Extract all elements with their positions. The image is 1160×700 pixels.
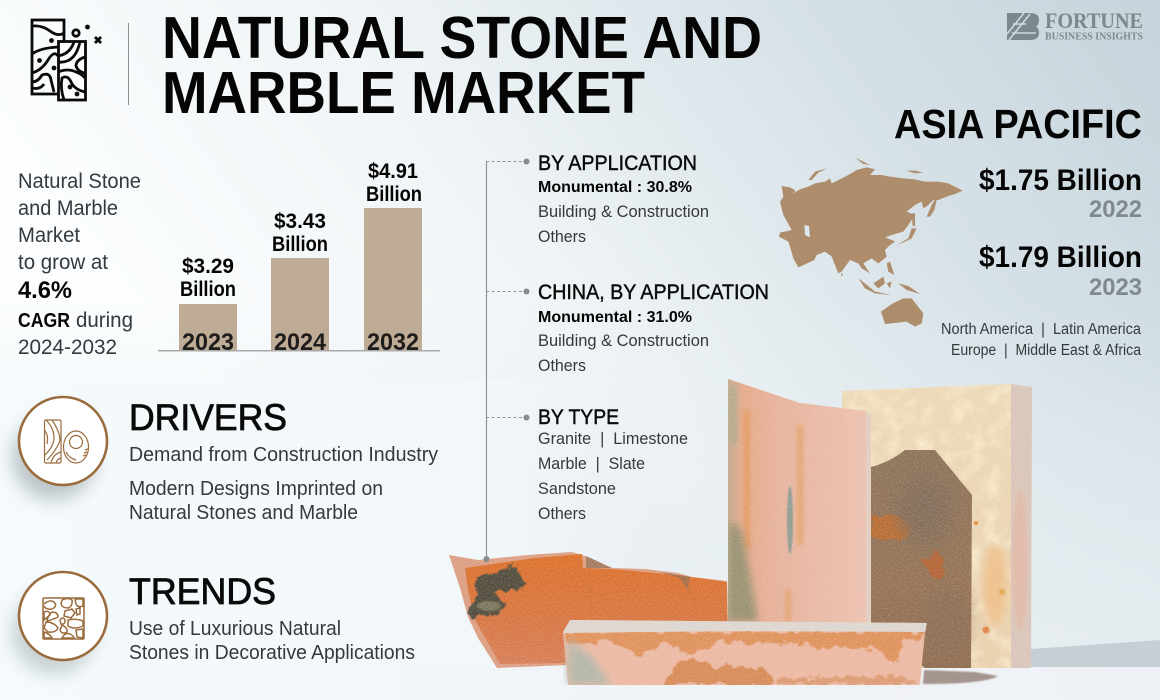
photo: natural stone blocks (300, 379, 1160, 700)
growth text: during (76, 309, 133, 332)
bar chart: market size: Billion (180, 278, 236, 301)
segment: by application: BY APPLICATION (538, 151, 697, 175)
growth text: to grow at (18, 251, 108, 274)
backdrop wedge and floor (300, 640, 1160, 700)
drivers text: Natural Stones and Marble (129, 502, 358, 524)
icon: trends (12, 572, 107, 674)
top-left icon: stone slabs (32, 20, 101, 100)
segment: China by application: Building & Construction (538, 331, 709, 350)
regional heading and figures (894, 101, 1142, 359)
growth text: 4.6% (18, 277, 72, 304)
growth text: Market (18, 224, 80, 247)
segment: by application (538, 151, 709, 246)
growth text (18, 170, 141, 359)
icon: drivers (12, 397, 107, 500)
logo: Fortune Business Insights (1007, 8, 1143, 42)
title: NATURAL STONE AND (162, 5, 762, 71)
regional heading and figures: Europe | Middle East & Africa (951, 342, 1141, 359)
growth text: 2024-2032 (18, 336, 117, 359)
segment: China by application: CHINA, BY APPLICATION (538, 280, 769, 304)
bar chart: market size: 2023 (182, 329, 234, 356)
segment: by type: Others (538, 504, 586, 523)
segment: by type: Sandstone (538, 479, 616, 498)
segment: by application: Building & Construction (538, 202, 709, 221)
growth text: CAGR (18, 310, 70, 332)
drivers text (129, 397, 438, 524)
bar chart: market size: 2032 (367, 329, 419, 356)
bar chart: market size: $4.91 (368, 160, 418, 183)
bar chart: market size (158, 160, 440, 356)
growth text: and Marble (18, 197, 118, 220)
stone: pink upright slab (728, 379, 871, 622)
trends text: Use of Luxurious Natural (129, 618, 341, 640)
segment: China by application (538, 280, 769, 375)
bar chart: market size: $3.43 (274, 210, 326, 233)
regional heading and figures: ASIA PACIFIC (894, 101, 1142, 147)
segment: by application: Others (538, 227, 586, 246)
segment: China by application: Monumental : 31.0% (538, 309, 692, 326)
trends text: Stones in Decorative Applications (129, 642, 415, 664)
growth text: Natural Stone (18, 170, 141, 193)
segment: China by application: Others (538, 356, 586, 375)
segment: by type: BY TYPE (538, 405, 619, 429)
map: Asia Pacific (779, 157, 963, 327)
bar chart: market size: $3.29 (182, 255, 234, 278)
logo: Fortune Business Insights: BUSINESS INSIGHTS (1045, 30, 1143, 42)
title: MARBLE MARKET (162, 60, 645, 126)
title (162, 5, 762, 126)
segment: by application: Monumental : 30.8% (538, 179, 692, 196)
regional heading and figures: $1.79 Billion (979, 241, 1142, 274)
bar chart: market size: Billion (272, 233, 328, 256)
logo: Fortune Business Insights: FORTUNE (1045, 8, 1143, 33)
stone: cream back slab (842, 384, 1032, 668)
regional heading and figures: $1.75 Billion (979, 164, 1142, 197)
drivers text: Demand from Construction Industry (129, 444, 438, 466)
stone: orange rock (449, 552, 728, 668)
segment: by type: Marble | Slate (538, 454, 645, 473)
drivers text: DRIVERS (129, 397, 287, 438)
floor shadow (923, 670, 998, 684)
bar chart: market size: 2024 (274, 329, 327, 356)
segment: by type (538, 405, 688, 523)
drivers text: Modern Designs Imprinted on (129, 478, 383, 500)
segment: by type: Granite | Limestone (538, 429, 688, 448)
regional heading and figures: 2022 (1089, 196, 1142, 223)
regional heading and figures: 2023 (1089, 274, 1142, 301)
segment connector (484, 158, 530, 562)
trends text (129, 571, 415, 664)
bar chart: market size: Billion (366, 183, 422, 206)
regional heading and figures: North America | Latin America (941, 321, 1141, 338)
stone: front pink slab (563, 620, 927, 685)
trends text: TRENDS (129, 571, 276, 612)
